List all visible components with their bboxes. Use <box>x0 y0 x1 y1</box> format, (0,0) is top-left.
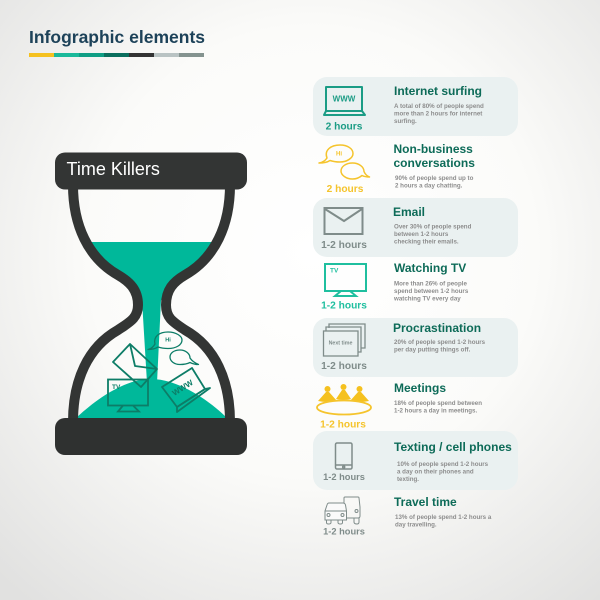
heading: Travel time <box>394 495 457 509</box>
heading: Internet surfing <box>394 84 482 98</box>
panel: procrastination <box>313 318 518 377</box>
description: 1-2 hours a day in meetings. <box>394 408 477 414</box>
icon: phone <box>336 443 352 469</box>
title: Infographic elements <box>29 27 205 47</box>
panel: texting <box>313 431 518 490</box>
heading: Procrastination <box>393 321 481 335</box>
description: 13% of people spend 1-2 hours a <box>395 514 492 521</box>
description: A total of 80% of people spend <box>394 103 484 110</box>
heading: Meetings <box>394 381 446 395</box>
panel: email <box>313 198 518 257</box>
icon: stacked pages <box>324 324 365 356</box>
time label: 1-2 hours <box>323 526 365 536</box>
time label: 1-2 hours <box>323 472 365 482</box>
time label: 1-2 hours <box>320 420 366 430</box>
time label: 1-2 hours <box>321 300 367 312</box>
description: checking their emails. <box>394 238 459 246</box>
icon: tv falling <box>108 380 148 412</box>
description: More than 26% of people <box>394 280 467 288</box>
description: 90% of people spend up to <box>395 175 474 182</box>
heading: Watching TV <box>394 261 466 275</box>
time label: 2 hours <box>327 184 364 195</box>
time label: 1-2 hours <box>321 240 367 251</box>
icon: cars <box>325 497 360 524</box>
description: 2 hours a day chatting. <box>395 182 463 190</box>
description: day travelling. <box>395 522 437 528</box>
hourglass <box>55 152 247 455</box>
icon: chat bubble <box>170 350 198 364</box>
heading: conversations <box>394 156 475 170</box>
description: spend between 1-2 hours <box>394 288 469 295</box>
description: surfing. <box>394 118 417 125</box>
description: a day on their phones and <box>397 468 474 476</box>
icon: chat bubbles <box>319 145 370 179</box>
time label: 1-2 hours <box>321 361 367 372</box>
icon: stacked pages: Next time <box>329 340 352 346</box>
heading: Email <box>393 205 425 219</box>
icon: laptop falling: WWW <box>171 378 195 398</box>
description: 10% of people spend 1-2 hours <box>397 461 489 468</box>
icon: chat bubble hi: Hi <box>165 338 171 344</box>
icon: chat bubble hi <box>148 332 182 350</box>
upper sand <box>88 242 215 383</box>
icon: tv: TV <box>330 268 339 274</box>
description: Over 30% of people spend <box>394 224 472 230</box>
description: between 1-2 hours <box>394 231 449 238</box>
glass walls <box>73 185 230 422</box>
icon: envelope falling <box>113 344 157 387</box>
time label: 2 hours <box>326 122 363 132</box>
description: more than 2 hours for internet <box>394 110 482 118</box>
description: texting. <box>397 476 419 483</box>
top bar with heading: Time Killers <box>66 159 160 179</box>
lower sand mound <box>76 379 227 418</box>
description: watching TV every day <box>393 296 461 302</box>
icon: chat bubbles: Hi <box>336 152 342 158</box>
description: 18% of people spend between <box>394 400 482 407</box>
top bar with heading <box>55 152 247 190</box>
bottom bar <box>55 418 247 455</box>
icon: meeting table <box>317 384 371 414</box>
icon: laptop falling <box>162 368 210 412</box>
icon: envelope <box>324 208 362 234</box>
description: 20% of people spend 1-2 hours <box>394 339 486 346</box>
panel: meetings <box>317 381 482 430</box>
icon: laptop: WWW <box>333 94 356 104</box>
icon: tv <box>325 264 366 296</box>
description: per day putting things off. <box>394 346 471 354</box>
panel: non-business conversations <box>319 142 475 195</box>
heading: Texting / cell phones <box>394 440 512 454</box>
title colour bar <box>29 53 204 57</box>
icon: laptop <box>324 87 365 115</box>
panel: travel time <box>323 495 492 536</box>
heading: Non-business <box>394 142 473 156</box>
icon: tv falling: TV <box>112 384 121 391</box>
panel: internet surfing <box>313 77 518 136</box>
panel: watching tv <box>321 261 469 312</box>
